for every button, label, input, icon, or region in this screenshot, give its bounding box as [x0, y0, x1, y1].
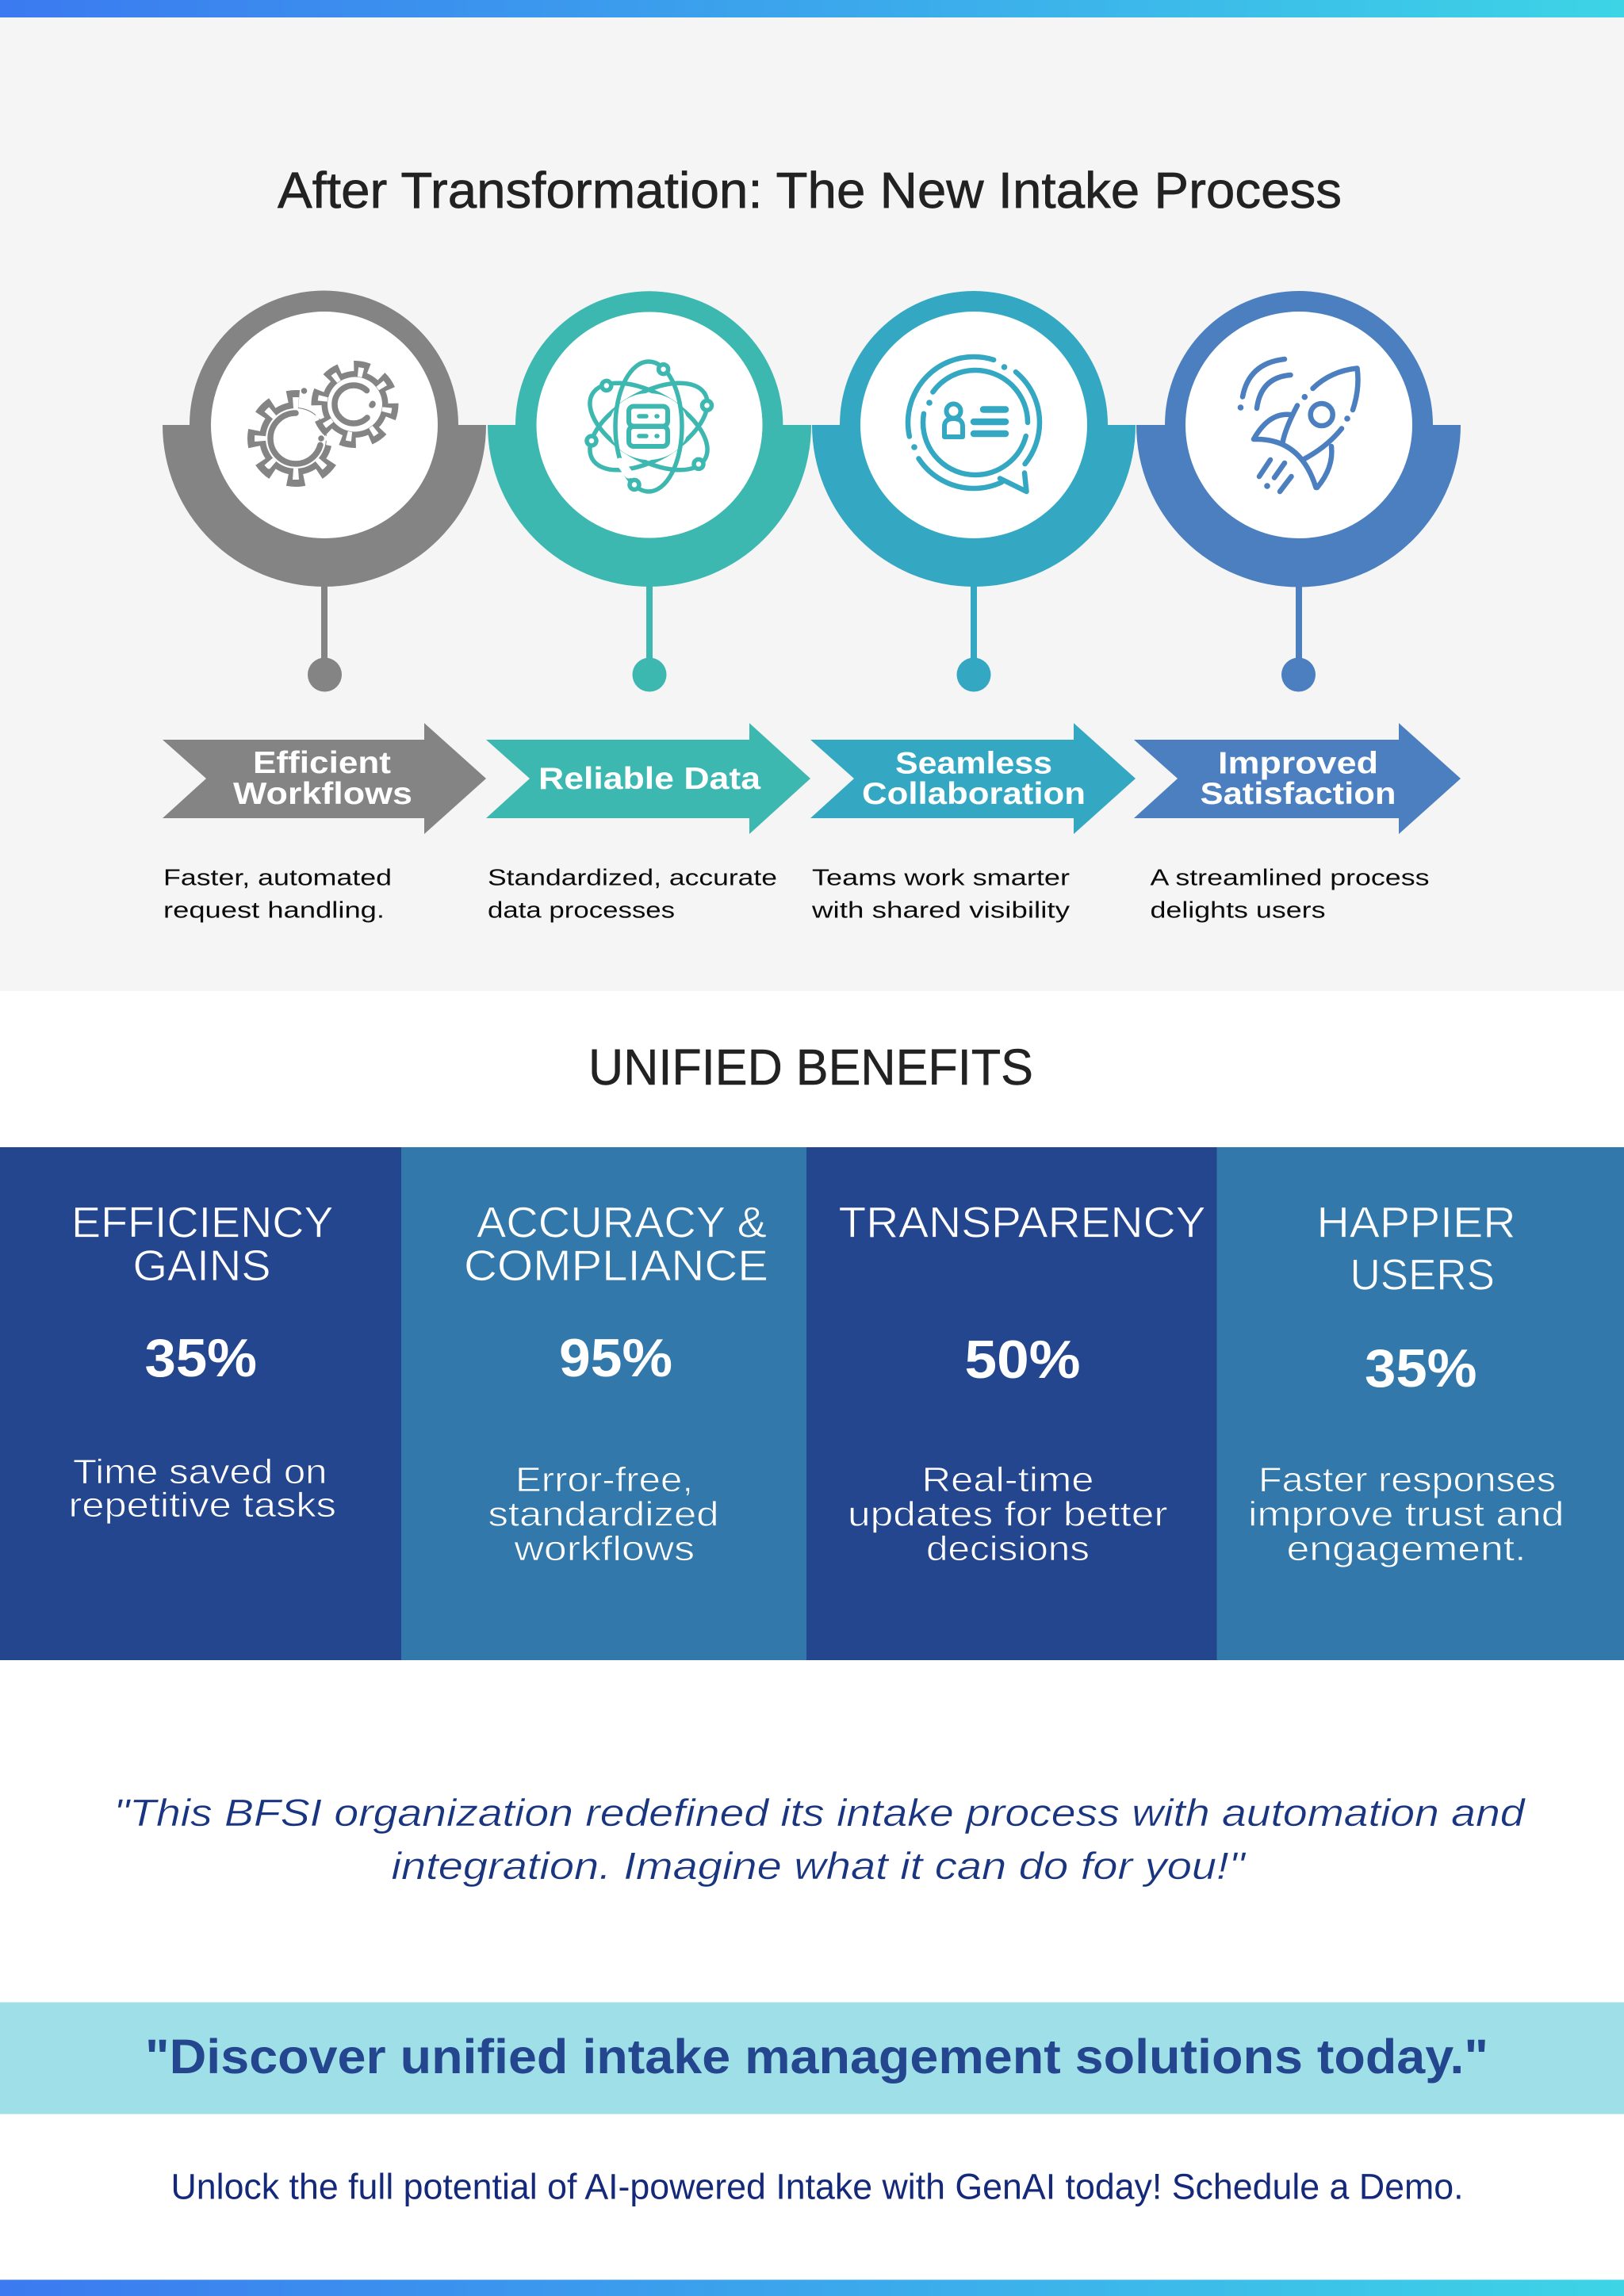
icon: gears	[255, 362, 398, 480]
step 3 circle: seamless collaboration	[812, 291, 1136, 691]
panel: happier users: improve trust and	[1248, 1495, 1564, 1533]
bottom gradient bar	[0, 2280, 1624, 2296]
step 1 circle: efficient workflows	[163, 291, 486, 691]
arrow 3: seamless collaboration	[810, 723, 1136, 834]
panel: transparency: TRANSPARENCY	[839, 1197, 1205, 1246]
step 2 circle: reliable data	[488, 291, 811, 691]
panel: efficiency gains	[0, 1147, 401, 1660]
panel: transparency: Real-time	[921, 1460, 1094, 1499]
step 2 description: Standardized, accurate	[488, 866, 777, 891]
panel: efficiency gains: repetitive tasks	[68, 1486, 336, 1525]
panel: transparency: updates for better	[848, 1495, 1167, 1533]
panel: happier users: Faster responses	[1258, 1460, 1556, 1499]
panel: accuracy and compliance: standardized	[488, 1495, 718, 1533]
panel: accuracy and compliance: Error-free,	[515, 1460, 693, 1499]
arrow 2: reliable data: Reliable Data	[538, 762, 760, 796]
panel: accuracy and compliance: workflows	[513, 1529, 695, 1568]
panel: happier users: HAPPIER	[1316, 1197, 1516, 1246]
step 3 description: Teams work smarter	[812, 866, 1070, 891]
step 2 description: data processes	[488, 897, 675, 923]
heading: unified benefits: UNIFIED BENEFITS	[588, 1039, 1033, 1096]
panel: happier users: 35%	[1365, 1338, 1477, 1399]
arrow 3: seamless collaboration: Seamless	[895, 747, 1052, 780]
panel: efficiency gains: EFFICIENCY	[71, 1197, 333, 1246]
step 3 description: with shared visibility	[811, 897, 1071, 923]
arrow 1: efficient workflows: Workflows	[233, 777, 412, 811]
call-to-action band: "Discover unified intake management solutions today."	[145, 2030, 1488, 2084]
icon: atom with server	[576, 362, 722, 492]
arrow 1: efficient workflows	[163, 723, 486, 834]
panel: accuracy and compliance: COMPLIANCE	[464, 1241, 768, 1290]
arrow 2: reliable data	[486, 723, 810, 834]
panel: accuracy and compliance	[401, 1147, 806, 1660]
step 1 description	[163, 866, 392, 923]
schedule a demo line: Unlock the full potential of AI-powered Intake with GenAI today! Schedule a Demo.	[171, 2166, 1464, 2207]
panel: accuracy and compliance: 95%	[559, 1328, 672, 1388]
arrow 4: improved satisfaction	[1134, 723, 1461, 834]
arrow 4: improved satisfaction: Improved	[1218, 747, 1378, 780]
panel: transparency: decisions	[926, 1529, 1090, 1568]
arrow 4: improved satisfaction: Satisfaction	[1201, 777, 1396, 811]
step 4 description	[1150, 866, 1429, 923]
arrow 3: seamless collaboration: Collaboration	[862, 777, 1086, 811]
panel: happier users: engagement.	[1286, 1529, 1526, 1568]
step 4 circle: improved satisfaction	[1136, 291, 1461, 691]
step 1 description: Faster, automated	[163, 866, 392, 891]
panel: happier users: USERS	[1350, 1249, 1495, 1299]
step 3 description	[811, 866, 1071, 923]
icon: chat bubble with contact card	[908, 357, 1040, 492]
quote	[114, 1793, 1526, 1888]
panel: new intake process	[0, 17, 1624, 991]
icon: rocket	[1238, 359, 1358, 492]
panel: efficiency gains: Time saved on	[73, 1452, 327, 1491]
step 2 description	[488, 866, 777, 923]
panel: efficiency gains: 35%	[144, 1328, 257, 1388]
panel: transparency: 50%	[964, 1330, 1080, 1390]
quote: "This BFSI organization redefined its intake process with automation and	[114, 1793, 1526, 1835]
panel: accuracy and compliance: ACCURACY &	[477, 1197, 767, 1246]
step 4 description: delights users	[1150, 897, 1326, 923]
panel: transparency	[806, 1147, 1216, 1660]
title: After Transformation: The New Intake Process	[278, 162, 1342, 219]
step 4 description: A streamlined process	[1150, 866, 1429, 891]
step 1 description: request handling.	[163, 897, 385, 923]
arrow 1: efficient workflows: Efficient	[253, 746, 391, 780]
quote: integration. Imagine what it can do for you!"	[392, 1846, 1247, 1888]
top gradient bar	[0, 0, 1624, 17]
panel: happier users	[1216, 1147, 1624, 1660]
call-to-action band	[0, 2003, 1624, 2114]
panel: efficiency gains: GAINS	[133, 1241, 271, 1290]
